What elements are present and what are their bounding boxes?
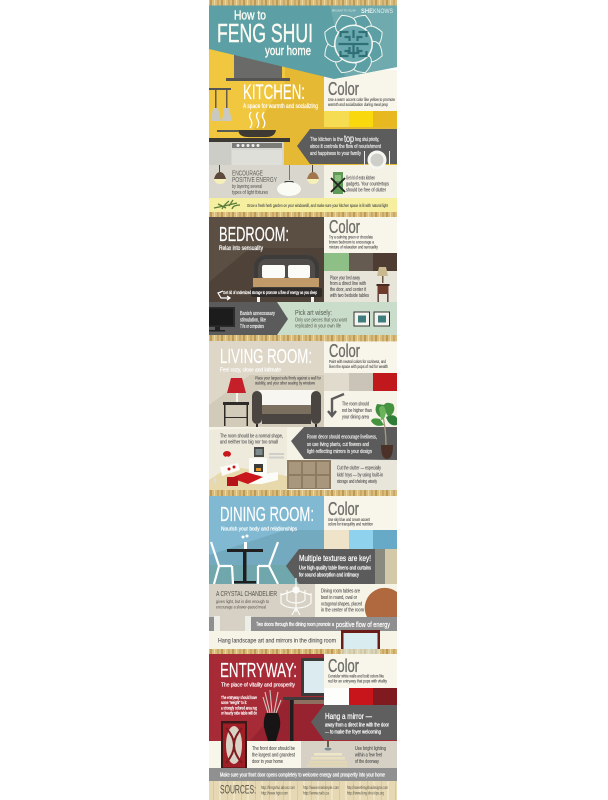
icon: down arrow — [328, 394, 344, 416]
panel: front door: door in your home — [252, 759, 283, 765]
panel: pick art: Only use pieces that you want — [295, 318, 347, 324]
band: doors: positive flow of energy — [336, 620, 390, 629]
icon: stove — [209, 138, 290, 165]
ceiling height tip: The room should — [342, 402, 369, 408]
panel: bright lighting: Use bright lighting — [355, 746, 386, 752]
sponsor logo: BROUGHT TO YOU BY — [332, 8, 356, 12]
panel: kitchen color: warmth and socialization during meal prep — [328, 102, 388, 107]
panel: bright lighting: of the doorway — [355, 759, 379, 765]
panel: room shape: and neither too big nor too small — [220, 440, 278, 446]
icon: steam — [250, 112, 265, 128]
wood strip — [209, 0, 397, 6]
panel: bright lighting: within a few feet — [355, 752, 382, 758]
ceiling height tip: your dining area — [342, 414, 369, 420]
panel: bedroom color: Try a calming green or chocolate — [329, 234, 373, 240]
panel: clutter tip: gadgets. Your countertops — [346, 182, 389, 188]
callout: hang a mirror: — to make the foyer welcoming — [325, 730, 381, 736]
band: doors: Two doors through the dining room promote a — [256, 622, 334, 628]
kitchen heading — [243, 81, 318, 110]
title: FENG SHUI — [217, 18, 313, 48]
panel: kitchen color: Color — [328, 79, 359, 99]
panel: front door: the largest and grandest — [252, 752, 295, 758]
bedroom heading — [219, 224, 289, 252]
icon: plate and cutlery — [364, 150, 390, 170]
panel: table shapes — [315, 584, 397, 617]
sponsor logo — [332, 8, 394, 15]
icon: mirror — [341, 630, 380, 654]
panel: pick art: Pick art wisely: — [295, 310, 332, 317]
icon: front door — [221, 721, 247, 768]
callout: textures: for sound absorption and intimacy — [299, 572, 359, 578]
band: final tip: Make sure your front door opens completely to welcome energy and prosperity into your home — [220, 772, 385, 778]
panel: dining color — [324, 496, 397, 549]
icon: red lamp on table — [223, 378, 249, 426]
panel: pick art: replicated in your own life — [295, 324, 341, 330]
panel: bedroom color: mixture of relaxation and sensuality — [329, 244, 378, 250]
panel: sources: http://www.nafs.ca — [303, 790, 329, 796]
panel: clutter: storage and shelving wisely — [337, 479, 377, 485]
herb garden strip: Grow a fresh herb garden on your windowsill, and make sure your kitchen space is lit with natural light — [247, 203, 388, 209]
panel: bedroom color — [324, 217, 397, 271]
callout: textures: Multiple textures are key! — [299, 553, 371, 563]
panel: clutter tip: should be free of clutter — [346, 188, 386, 194]
icon: hanging utensils — [209, 88, 232, 121]
panel: banish stimulation: stimulation, like — [240, 318, 266, 324]
panel: sources: http://fengshui.about.com — [261, 785, 295, 790]
sofa tip — [255, 376, 321, 386]
band: doors — [209, 616, 397, 631]
band: final tip — [209, 768, 397, 781]
panel: living color: liven the space with pops of red for wealth — [329, 364, 388, 369]
panel: light fixtures: by layering several — [232, 184, 262, 190]
panel: entry color — [324, 654, 397, 705]
callout: top priority: feng shui priority, — [355, 137, 379, 143]
callout: hang a mirror: away from a direct line with the door — [325, 722, 389, 728]
panel: table shapes: Dining room tables are — [321, 588, 360, 594]
kitchen yellow wall — [209, 45, 324, 166]
weight tip: a strongly colored area rug — [221, 706, 257, 710]
callout: room decor: so use living plants, cut flowers and — [307, 442, 369, 448]
bedroom heading: Relax into sensuality — [219, 246, 263, 252]
icon: television — [209, 307, 235, 332]
callout: room decor — [291, 427, 397, 460]
sofa tip: stability, and your other seating by windows — [255, 380, 315, 386]
panel: dining color: Use sky blue and cream accent — [328, 517, 370, 522]
weight tip: The entryway should have — [221, 695, 257, 700]
dining heading: Nourish your body and relationships — [221, 526, 297, 532]
title — [217, 8, 313, 58]
panel: crystal chandelier: encourage a slower-paced meal — [216, 604, 266, 610]
icon: pendant lamps — [214, 165, 319, 196]
panel: bedroom color: Color — [329, 217, 360, 237]
panel: light fixtures: types of light fixtures — [232, 190, 268, 196]
panel: living color — [324, 341, 397, 427]
icon: chandelier — [281, 578, 311, 615]
icon: framed art — [354, 312, 390, 326]
section: living room — [209, 341, 397, 496]
icon: herbs — [214, 200, 240, 209]
panel: banish stimulation: TVs or computers — [240, 324, 264, 330]
panel: crystal chandelier: gives light, but is dim enough to — [216, 599, 269, 605]
panel: bed placement: Place your bed away — [330, 276, 360, 282]
icon: lotus medallion — [321, 11, 386, 77]
section: dining room — [209, 496, 397, 654]
icon: crossed gadget — [331, 172, 345, 194]
icon: round table — [365, 588, 397, 617]
icon: double doors — [214, 616, 251, 631]
living heading — [220, 346, 312, 374]
panel: light fixtures — [209, 165, 324, 198]
sponsor logo: KNOWS — [373, 8, 394, 15]
icon: vase with branches — [263, 690, 281, 741]
panel: living color: Paint with neutral colors for coziness, and — [329, 359, 386, 364]
entry heading: The place of vitality and prosperity — [221, 682, 295, 688]
section: header and kitchen — [209, 0, 397, 218]
callout: hang a mirror — [311, 705, 397, 740]
icon: range hood — [226, 54, 290, 81]
section: bedroom — [209, 217, 397, 342]
panel: front door: The front door should be — [252, 746, 295, 752]
callout: top priority: The kitchen is the — [310, 137, 343, 143]
panel: bed placement: the door, and center it — [330, 287, 366, 293]
panel: dining color: colors for tranquility and nutrition — [328, 522, 373, 526]
panel: sources — [209, 781, 397, 800]
entry heading: ENTRYWAY: — [220, 660, 297, 682]
panel: clutter tip: Get rid of extra kitchen — [346, 176, 375, 182]
icon: dining table and chairs — [211, 534, 278, 584]
callout: room decor: light-reflecting mirrors in your design — [307, 449, 372, 455]
sofa tip: Place your largest sofa firmly against a wall for — [255, 376, 321, 382]
panel: bed placement — [324, 267, 397, 303]
weight tip — [221, 695, 257, 716]
panel: kitchen color — [324, 70, 397, 165]
icon: tiered light — [307, 741, 347, 766]
weight tip: or hearty side table will do — [221, 710, 257, 716]
panel: dining color: Color — [328, 499, 359, 519]
panel: sources: SOURCES: — [220, 782, 256, 796]
icon: wall mirror — [301, 658, 325, 696]
storage tip: Get rid of undersized storage to promote a flow of energy as you sleep — [223, 290, 317, 295]
section: entryway — [209, 654, 397, 800]
panel: entry color: red for an entryway that pops with vitality — [328, 678, 387, 684]
icon: frying pan — [217, 130, 276, 137]
panel: bed placement: with two bedside tables — [330, 293, 369, 299]
kitchen heading: KITCHEN: — [243, 81, 305, 104]
panel: entry color: Consider white walls and bold colors like — [328, 674, 384, 678]
panel: room shape — [209, 427, 324, 490]
title: How to — [234, 8, 266, 22]
banner — [209, 5, 397, 79]
panel: clutter: Cut the clutter — especially — [337, 466, 381, 472]
panel: entry color: Color — [328, 656, 359, 676]
callout: room decor: Room decor should encourage liveliness, — [307, 434, 377, 440]
strip: landscape art: Hang landscape art and mirrors in the dining room — [218, 638, 336, 644]
strip: landscape art — [209, 630, 397, 654]
panel: banish stimulation — [209, 302, 288, 335]
icon: bed — [251, 255, 322, 302]
mirror lower edge — [341, 649, 380, 654]
icon: storage cabinet — [287, 460, 331, 489]
title: your home — [265, 44, 311, 58]
panel: sources: http://www.realsimple.com — [303, 785, 339, 790]
sponsor logo: SHE — [361, 8, 374, 15]
panel: bright lighting — [301, 741, 397, 768]
illustration: miniature room — [214, 447, 284, 486]
panel: clutter tip — [324, 165, 397, 198]
herb garden strip — [209, 198, 397, 212]
dining heading — [220, 504, 314, 532]
panel: front door — [209, 741, 301, 768]
panel: table shapes: in the center of the room — [321, 608, 364, 614]
panel: banish stimulation: Banish unnecessary — [240, 311, 275, 317]
icon: potted plant — [371, 403, 397, 459]
panel: clutter: kids' toys — by using built-in — [337, 472, 383, 478]
ceiling height tip: not be higher than — [342, 408, 372, 414]
callout: textures: Use high-quality table linens and curtains — [299, 566, 371, 572]
entry heading — [220, 660, 297, 688]
panel: table shapes: best in round, oval or — [321, 595, 357, 601]
callout: top priority — [297, 129, 397, 164]
living heading: LIVING ROOM: — [220, 346, 312, 368]
panel: sources: http://www.feng-shui-tips.org — [347, 790, 384, 796]
callout: textures — [286, 549, 397, 584]
panel: kitchen color: Use a warm accent color like yellow to promote — [328, 97, 395, 102]
bedroom heading: BEDROOM: — [219, 224, 289, 246]
callout: top priority: and happiness to your family — [310, 151, 361, 157]
panel: light fixtures: ENCOURAGE — [232, 168, 263, 178]
panel: living color: Color — [329, 341, 360, 361]
weight tip: some "weight" to it: — [221, 700, 247, 705]
icon: console table — [283, 697, 324, 741]
panel: bedroom color: brown bedroom to encourage a — [329, 240, 374, 244]
icon: bedside lamp and table — [376, 267, 390, 303]
icon: sofa — [252, 390, 321, 427]
ceiling height tip — [342, 402, 372, 420]
panel: light fixtures: POSITIVE ENERGY — [232, 175, 277, 184]
panel: pick art — [270, 302, 397, 335]
panel: clutter — [331, 460, 397, 490]
panel: room shape: The room should be a normal shape, — [220, 434, 283, 440]
panel: table shapes: octagonal shapes, placed — [321, 602, 362, 608]
icon: flow arrow — [218, 291, 230, 300]
panel: crystal chandelier — [209, 578, 315, 617]
dining heading: DINING ROOM: — [220, 504, 314, 526]
panel: crystal chandelier: A CRYSTAL CHANDELIER — [216, 589, 277, 598]
callout: top priority: top — [344, 134, 354, 145]
callout: hang a mirror: Hang a mirror — — [325, 711, 372, 721]
kitchen heading: A space for warmth and socializing — [243, 103, 318, 110]
callout: top priority: since it controls the flow of nourishment — [310, 144, 381, 150]
panel: bed placement: from a direct line with — [330, 281, 366, 287]
panel: sources: http://www.hgtv.com — [261, 790, 288, 796]
living heading: Feel cozy, close and intimate — [220, 368, 281, 374]
panel: sources: http://sweetfengshuidesigns.com — [347, 785, 388, 790]
